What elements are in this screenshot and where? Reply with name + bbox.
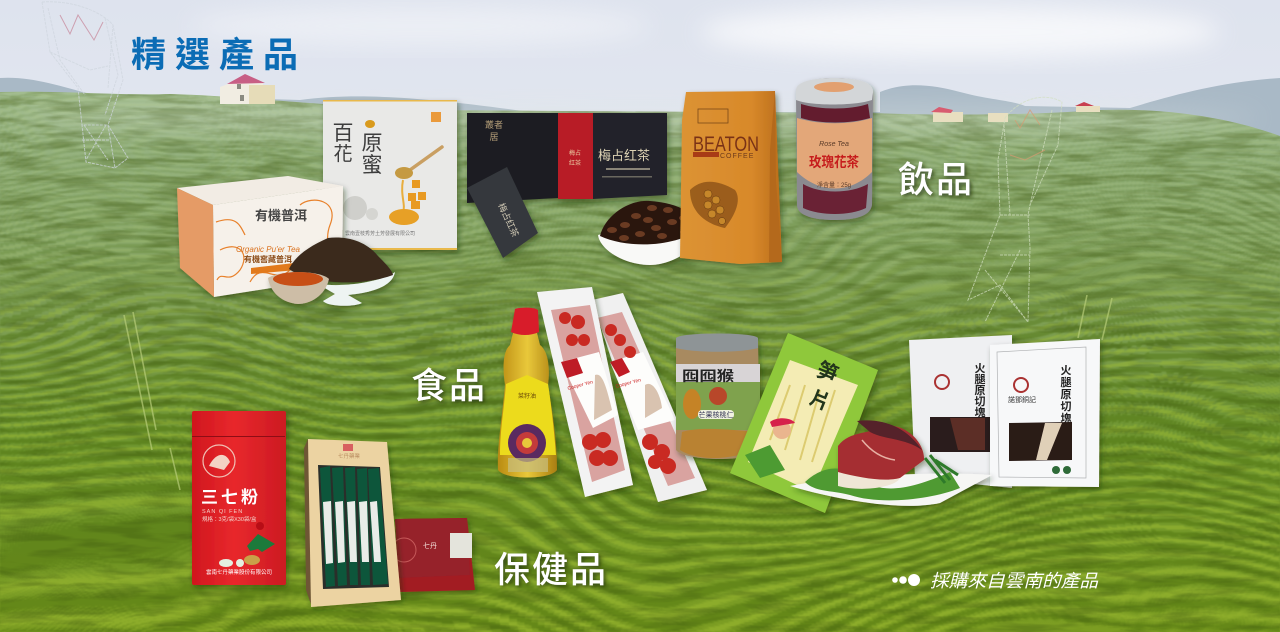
BEATON coffee bag: COFFEE	[720, 153, 754, 160]
honey box: 原	[362, 132, 382, 155]
ham boxes: 腿	[974, 372, 986, 386]
distant houses	[931, 102, 1100, 122]
black tea box: 叢者	[485, 120, 503, 130]
product group: beverages	[177, 78, 873, 306]
ham boxes: 切	[974, 395, 986, 408]
ham boxes: 塊	[974, 405, 986, 419]
oil bottle: 菜籽油	[518, 392, 536, 400]
house on hill	[220, 74, 275, 104]
honey box: 雲南壹枝秀芳土芳發展有限公司	[345, 230, 415, 237]
black tea box: 梅占红茶	[496, 201, 521, 238]
red box	[392, 518, 475, 592]
product group: foods: 腿	[1060, 375, 1072, 389]
black tea box: 梅占	[569, 149, 581, 157]
bamboo shoot pack	[730, 333, 878, 513]
ham boxes: 火	[974, 362, 986, 375]
tomato pack 2	[592, 293, 707, 502]
rose tea jar	[796, 78, 873, 220]
product group: health products	[192, 411, 475, 607]
Pu'er tea box: Organic Pu'er Tea	[236, 245, 301, 254]
tea plate	[268, 238, 395, 306]
gift box with sachets: 七丹藥業	[338, 452, 360, 460]
Pu'er tea box: 有機普洱	[255, 208, 307, 223]
oil bottle	[498, 308, 557, 478]
label: beverages: 飲品	[898, 159, 974, 200]
mango nut jar: 囮囮猴	[682, 368, 734, 384]
product group: foods: 火	[1060, 364, 1072, 377]
tomato pack 1: Cooper Yen	[567, 379, 594, 392]
mango nut jar	[676, 334, 760, 459]
BEATON coffee bag	[680, 91, 782, 264]
Sanqi powder can: 規格：3克/袋X30袋/盒	[202, 515, 257, 523]
black tea box	[467, 113, 667, 258]
Pu'er tea box: 有機窖藏普洱	[244, 254, 292, 264]
ham boxes: 原	[974, 384, 986, 397]
honey box: 花	[333, 143, 353, 165]
Sanqi powder can: 三七粉	[201, 488, 261, 507]
transmission tower right	[968, 97, 1062, 322]
gift box with sachets	[304, 439, 401, 607]
Sanqi powder can: SAN QI FEN	[202, 509, 243, 515]
utility poles	[124, 295, 1112, 490]
coffee bean bowl	[598, 201, 703, 265]
BEATON coffee bag: BEATON	[693, 133, 759, 156]
transmission tower left	[42, 2, 128, 168]
black tea box: 居	[489, 132, 499, 142]
honey box: 蜜	[362, 154, 382, 177]
product group: foods: 原	[1060, 388, 1072, 401]
ham plate	[790, 420, 992, 506]
footnote: sourced from Yunnan: 採購來自雲南的產品	[930, 571, 1099, 591]
Sanqi powder can: 雲南七丹藥業股份有限公司	[206, 568, 272, 576]
Pu'er tea box	[177, 176, 343, 297]
honey box: 百	[332, 122, 354, 145]
rose tea jar: 淨含量：25g	[817, 181, 851, 189]
label: health products: 保健品	[494, 549, 608, 590]
product group: foods: 塊	[1060, 411, 1072, 425]
rose tea jar: Rose Tea	[819, 141, 849, 148]
ham boxes	[909, 335, 1012, 488]
product group: foods	[498, 287, 1100, 513]
bamboo shoot pack: 片	[806, 386, 833, 415]
rose tea jar: 玫瑰花茶	[809, 154, 859, 170]
bamboo shoot pack: 笋	[813, 358, 841, 388]
mango nut jar: 芒果核桃仁	[698, 410, 734, 419]
product group: foods: 諾鄧銅記	[1008, 395, 1036, 404]
product group: foods: 切	[1060, 400, 1072, 413]
tomato pack 1	[537, 287, 633, 497]
Sanqi powder can	[192, 411, 286, 585]
black tea box: 梅占红茶	[598, 148, 650, 163]
honey box	[323, 100, 457, 250]
red box: 七丹	[423, 541, 437, 550]
title: 精選產品	[131, 36, 307, 75]
black tea box: 红茶	[569, 159, 581, 167]
label: foods: 食品	[411, 365, 487, 406]
tomato pack 2: Cooper Yen	[615, 377, 642, 390]
